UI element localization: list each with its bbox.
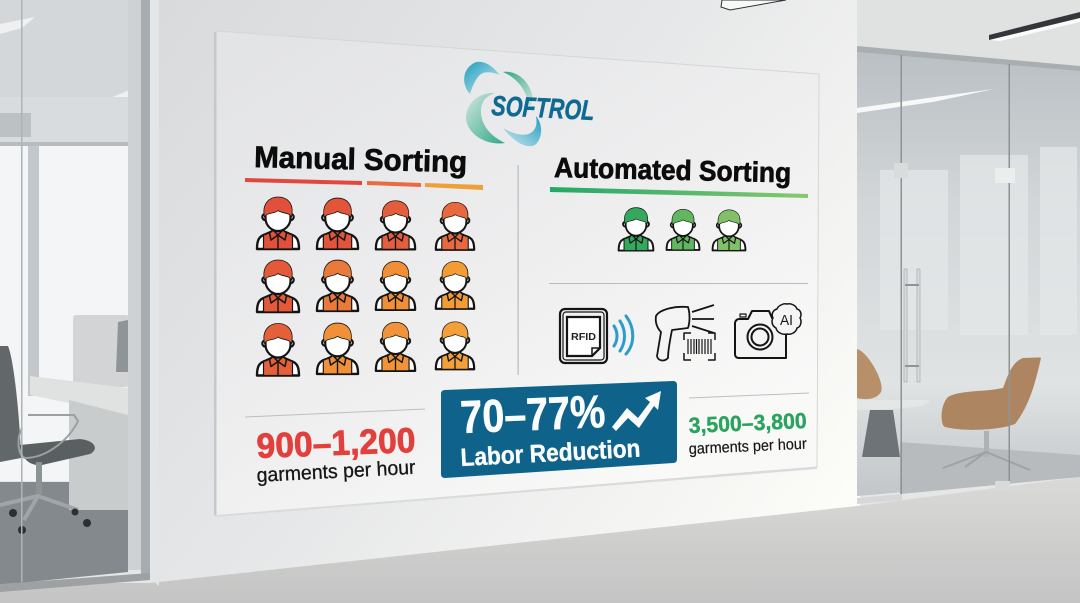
stat: manual throughput: garments per hour	[256, 457, 416, 487]
stat: automated throughput	[688, 408, 807, 458]
background: office chair	[0, 346, 95, 534]
stat: automated throughput: 3,500–3,800	[688, 408, 807, 438]
stat: manual throughput: 900–1,200	[256, 421, 416, 466]
callout: labor reduction	[441, 381, 677, 478]
icon: RFID tag	[560, 309, 633, 363]
automated sorting underline bar	[550, 187, 808, 198]
AI brain: AI	[780, 312, 793, 329]
background: right glass partition	[857, 46, 1080, 504]
icon: barcode scanner	[656, 305, 715, 360]
worker row 3	[257, 322, 474, 376]
icon: RFID tag: RFID	[571, 331, 596, 343]
automated workers	[619, 208, 745, 251]
worker row 2	[257, 260, 474, 312]
manual sorting underline bars	[245, 178, 483, 190]
callout: labor reduction: Labor Reduction	[460, 435, 641, 472]
background: left glass office	[0, 0, 135, 585]
background: left door frame	[0, 0, 159, 592]
background: office wall	[150, 0, 860, 590]
background: concrete floor	[0, 477, 1080, 603]
logo: Softrol	[464, 62, 595, 146]
background: ceiling light left	[721, 0, 786, 10]
icon: rising arrow	[612, 391, 661, 431]
icon: radio waves	[614, 316, 633, 354]
heading: Automated Sorting: Automated Sorting	[554, 152, 792, 188]
logo wordmark: SOFTROL	[491, 90, 595, 126]
worker row 1	[257, 197, 474, 250]
callout: labor reduction: 70–77%	[459, 385, 606, 443]
divider: vertical	[518, 165, 519, 375]
stat: automated throughput: garments per hour	[688, 436, 807, 458]
background: ceiling light right	[989, 12, 1080, 41]
panel: infographic board	[214, 31, 819, 517]
stat: manual throughput	[256, 421, 416, 487]
icon: AI camera	[735, 304, 801, 358]
background: ceiling on right	[857, 0, 1080, 70]
stat divider right	[689, 393, 809, 398]
manual workers grid	[257, 197, 474, 376]
divider: automated	[549, 283, 808, 284]
heading: Manual Sorting: Manual Sorting	[254, 141, 468, 179]
stat divider left	[245, 409, 425, 417]
